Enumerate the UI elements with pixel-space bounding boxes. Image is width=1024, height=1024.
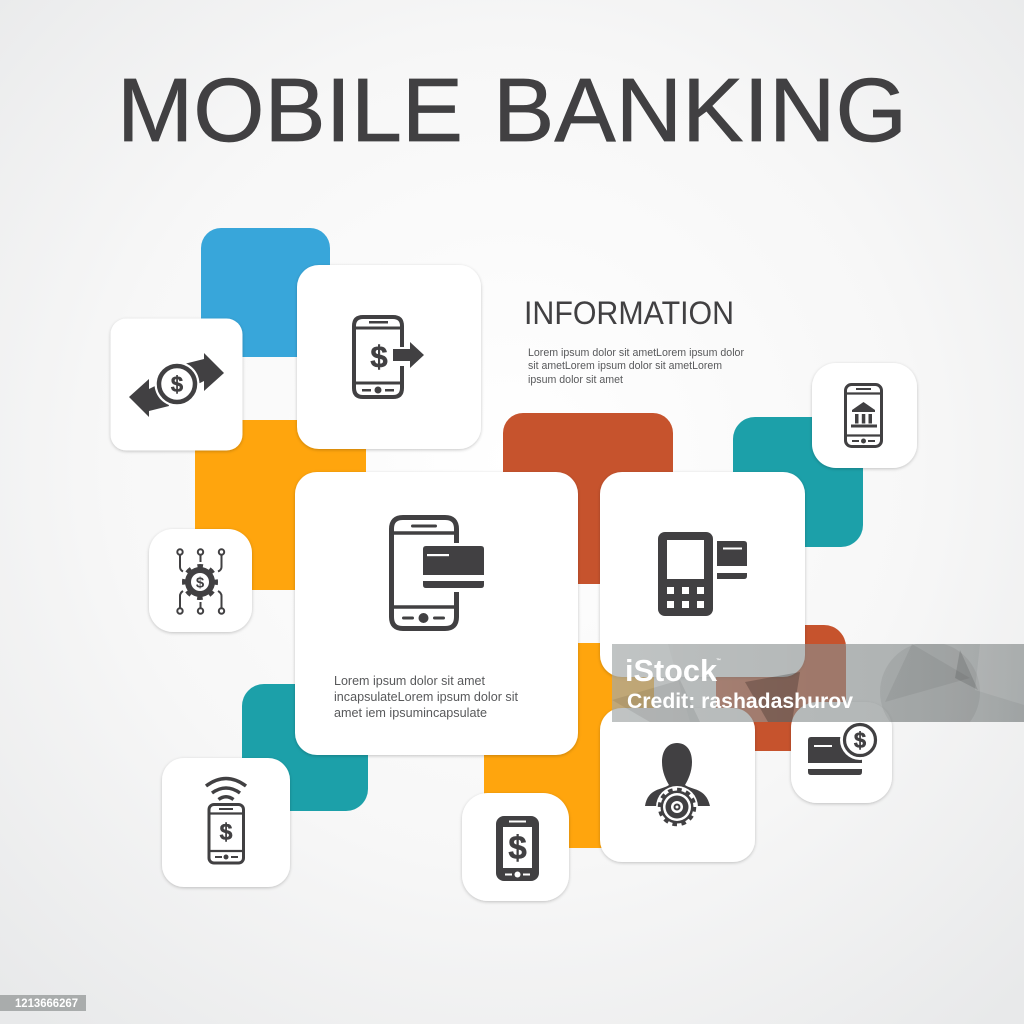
icon: user with gear (645, 743, 710, 828)
panel: main mobile card (295, 472, 578, 755)
panel: mobile transfer (297, 265, 481, 449)
watermark text: ™ (716, 658, 721, 664)
title (117, 61, 907, 161)
title: MOBILE (117, 61, 463, 161)
icon: phone with credit card (391, 518, 484, 628)
text block: information body (528, 347, 744, 386)
heading: information: INFORMATION (524, 295, 734, 331)
icon: phone with dollar and arrow (354, 317, 424, 397)
icon: currency exchange arrows: $ (171, 372, 183, 397)
text block: information body: ipsum dolor sit amet (528, 374, 623, 386)
block: blue (201, 228, 330, 357)
text block: main body: incapsulateLorem ipsum dolor sit (334, 690, 519, 704)
watermark banner (612, 644, 1024, 722)
coloured blocks (195, 228, 863, 848)
panel: fintech gear (149, 529, 252, 632)
block: teal lower (242, 684, 368, 811)
text block: main body: Lorem ipsum dolor sit amet (334, 674, 486, 688)
block: orange left (195, 420, 366, 590)
icon: phone with wifi and dollar: $ (220, 819, 233, 845)
panel: POS terminal (600, 472, 805, 677)
image id tag (0, 995, 86, 1011)
icon: solid phone with dollar: $ (508, 829, 527, 866)
text block: main body (334, 674, 519, 720)
block: orange lower (484, 643, 654, 848)
icon: phone with dollar and arrow: $ (370, 339, 388, 374)
icon: POS terminal with card (658, 532, 747, 616)
image id tag: 1213666267 (15, 998, 78, 1010)
panel: card payment (791, 702, 892, 803)
panel: mobile dollar (462, 793, 569, 901)
panel: mobile bank (812, 363, 917, 468)
watermark text: Credit: rashadashurov (627, 690, 853, 713)
icon: phone with bank building (845, 384, 882, 446)
watermark text: iStock (625, 653, 718, 688)
block: red right (716, 625, 846, 751)
block: red centre (503, 413, 673, 584)
icon: credit card with dollar coin: $ (854, 728, 866, 753)
panel: wireless payment (162, 758, 290, 887)
panel: exchange arrows (110, 318, 242, 450)
watermark text (625, 653, 853, 713)
text block: main body: amet iem ipsumincapsulate (334, 706, 487, 720)
text block: information body: Lorem ipsum dolor sit ametLorem ipsum dolor (528, 347, 744, 359)
block: teal right (733, 417, 863, 547)
title: BANKING (493, 61, 907, 161)
text block: information body: sit ametLorem ipsum dolor sit ametLorem (528, 360, 722, 372)
panel: account settings (600, 708, 755, 862)
icon: gear with circuit lines: $ (196, 574, 205, 592)
